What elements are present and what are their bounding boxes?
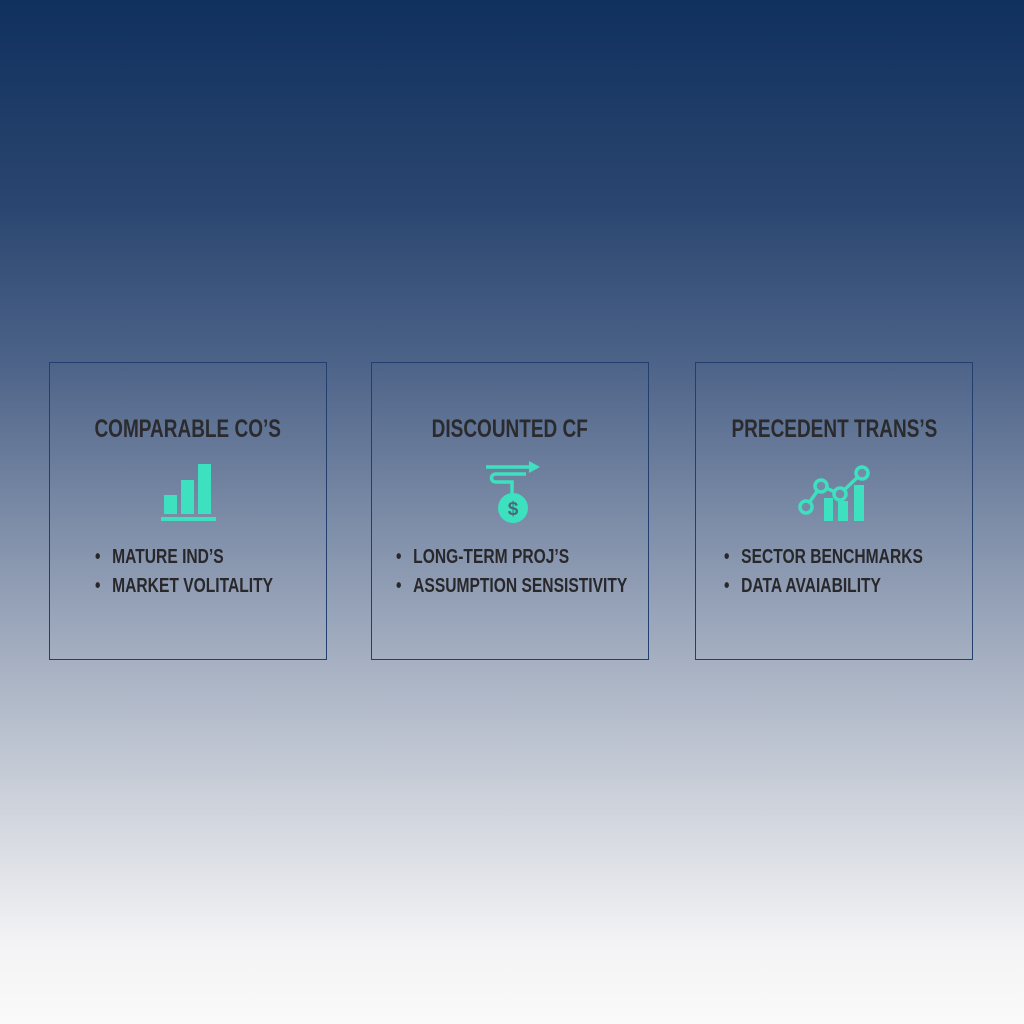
bullets: SECTOR BENCHMARKS	[741, 546, 923, 568]
bullets: MARKET VOLITALITY	[112, 575, 273, 597]
bullets: MATURE IND’S	[112, 546, 224, 568]
icon: line and bar chart	[798, 465, 870, 521]
panel: discounted cash flow	[371, 362, 649, 660]
bullets	[96, 546, 273, 597]
bullets	[396, 546, 627, 597]
heading: discounted cf: DISCOUNTED CF	[432, 415, 588, 443]
icon: arrow with dollar coin: $	[508, 499, 519, 520]
panel: comparable companies	[49, 362, 327, 660]
panel: precedent transactions	[695, 362, 973, 660]
heading: comparable co's: COMPARABLE CO’S	[95, 415, 281, 443]
bullets: LONG-TERM PROJ’S	[413, 546, 569, 568]
bullets: ASSUMPTION SENSISTIVITY	[413, 575, 627, 597]
icon: bar chart	[161, 464, 216, 521]
bullets: DATA AVAIABILITY	[741, 575, 881, 597]
bullets	[724, 546, 923, 597]
heading: precedent trans's: PRECEDENT TRANS’S	[731, 415, 937, 443]
icon: arrow with dollar coin	[486, 461, 540, 523]
